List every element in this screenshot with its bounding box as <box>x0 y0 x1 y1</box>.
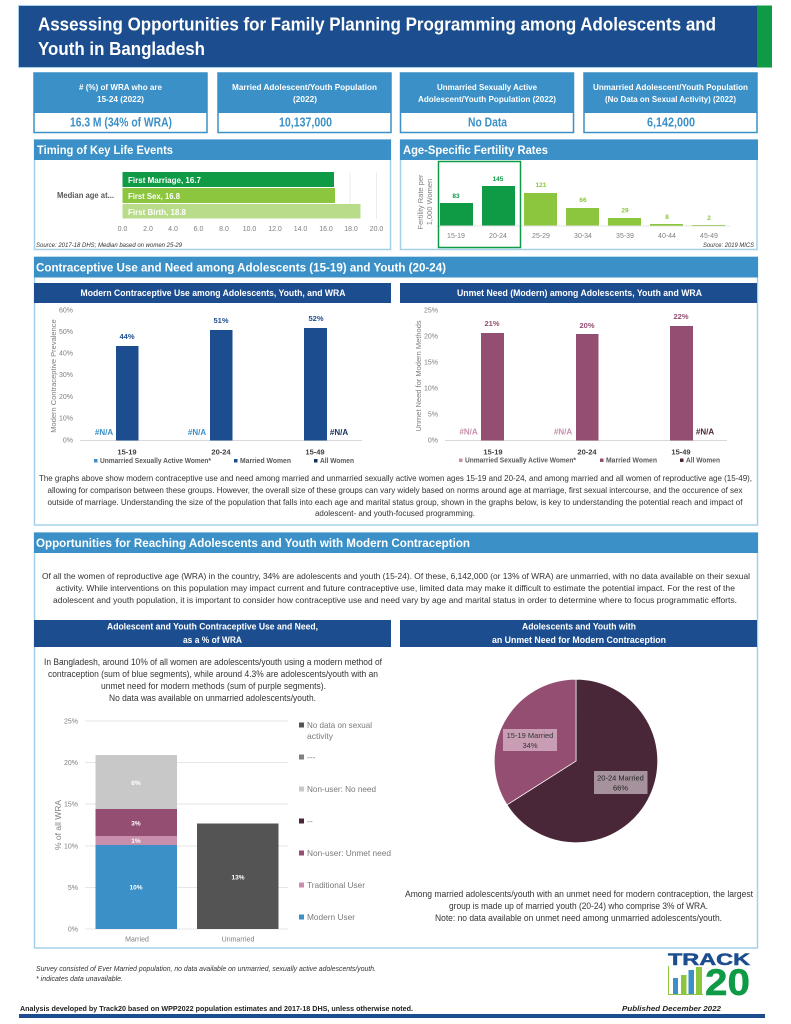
bar chart: unmet need: #N/A <box>554 428 572 436</box>
bar chart: median age: 14.0 <box>294 226 307 233</box>
text block: graphs explanation <box>39 473 752 518</box>
stacked bar chart: percent of WRA: Married <box>125 936 149 944</box>
bar chart: unmet need: 5% <box>428 412 438 418</box>
bar chart: modern contraceptive use: 50% <box>59 329 73 336</box>
stat card: unmarried no data population: 6,142,000 <box>647 116 695 130</box>
legend: modern use <box>94 458 354 465</box>
bar chart: unmet need: #N/A <box>459 428 478 436</box>
pie label: 15-19 married: 34% <box>522 741 538 750</box>
legend: unmet need <box>459 458 720 464</box>
panel: age-specific fertility rates <box>400 140 758 250</box>
bar chart: unmet need: 20% <box>424 334 438 340</box>
stat card: married population: 10,137,000 <box>279 116 332 130</box>
bar chart: modern contraceptive use: 15-49 <box>305 448 325 456</box>
text block: pie description: Among married adolescents/youth with an unmet need for modern contraception, the largest <box>405 889 753 899</box>
bar chart: fertility rate by age: 25-29 <box>532 233 550 240</box>
subheading: unmet need for modern contraception: Adolescents and Youth with <box>522 622 636 632</box>
bar chart: modern contraceptive use: 10% <box>59 416 73 422</box>
bar chart: fertility rate by age: 121 <box>536 182 547 189</box>
bar chart: unmet need: 22% <box>673 312 689 321</box>
heading: opportunities: Opportunities for Reaching Adolescents and Youth with Modern Contraception <box>36 536 470 550</box>
bar chart: fertility rate by age: 35-39 <box>616 233 634 240</box>
bar chart: median age: 20.0 <box>370 226 383 233</box>
bar chart: modern contraceptive use: 51% <box>213 316 229 325</box>
text block: stacked chart description: unmet need for modern methods (sum of purple segments). <box>101 681 326 691</box>
bar chart: modern contraceptive use: 0% <box>63 438 73 444</box>
subheading: unmet need: Unmet Need (Modern) among Adolescents, Youth and WRA <box>457 288 702 298</box>
bar chart: fertility rate by age: 1,000 Women <box>425 179 434 225</box>
legend: stacked chart <box>299 720 391 922</box>
bar chart: median age: 4.0 <box>168 226 178 233</box>
source note: Source: 2019 MICS <box>703 243 754 249</box>
stat card: WRA 15-24 <box>34 73 207 132</box>
stacked bar chart: percent of WRA: 5% <box>68 885 78 892</box>
legend: stacked chart: --- <box>307 752 316 762</box>
bar chart: median age <box>57 172 383 233</box>
stat card: married population <box>218 73 391 132</box>
stat card: unmarried sexually active population: No Data <box>468 116 508 130</box>
subheading: use and need as percent of WRA: as a % of WRA <box>183 635 242 645</box>
footnotes: * indicates data unavailable. <box>36 976 123 983</box>
bar chart: fertility rate by age: 83 <box>452 193 460 200</box>
stacked bar chart: percent of WRA: 10% <box>64 844 78 850</box>
highlight box: 15-24 ages <box>438 162 520 248</box>
legend: modern use: Unmarried Sexually Active Women* <box>100 458 211 465</box>
bar chart: fertility rate by age: 8 <box>665 214 669 221</box>
stacked bar chart: percent of WRA: 10% <box>129 884 143 892</box>
text block: opportunities intro: activity. While interventions on this population may impact current and future contraceptive use, limited data may make it difficult to estimate the potential impact. For the rest of the <box>56 583 735 593</box>
stat card: unmarried no data population: Unmarried Adolescent/Youth Population <box>593 82 748 92</box>
bar chart: unmet need: 20-24 <box>577 448 597 456</box>
bar chart: median age: First Sex, 16.8 <box>128 192 181 201</box>
stacked bar chart: percent of WRA: 6% <box>131 780 141 787</box>
text block: stacked chart description: No data was available on unmarried adolescents/youth. <box>109 693 316 703</box>
subheading: use and need as percent of WRA: Adolescent and Youth Contraceptive Use and Need, <box>107 622 318 632</box>
logo: Track20: TRACK <box>668 950 751 969</box>
pie label: 15-19 married: 15-19 Married <box>507 731 553 740</box>
stat card: married population: (2022) <box>293 94 317 104</box>
bar chart: fertility rate by age <box>416 174 730 240</box>
stacked bar chart: percent of WRA: 0% <box>68 926 78 934</box>
footer: analysis credit: Analysis developed by Track20 based on WPP2022 population estimates and 2017-18 DHS, unless otherwise noted. <box>20 1004 413 1013</box>
title <box>38 14 716 59</box>
bar chart: median age: First Birth, 18.8 <box>128 208 187 217</box>
stacked bar chart: percent of WRA: 13% <box>231 874 245 882</box>
legend: stacked chart: activity <box>307 731 334 741</box>
panel: opportunities for reaching adolescents and youth <box>34 532 758 948</box>
footer bar <box>19 1014 765 1018</box>
bar chart: median age: 18.0 <box>344 226 358 233</box>
text block: graphs explanation: outside of marriage. Understanding the size of the population that falls into each age and marital status group, shown in the graphs below, is key to understanding the potential reach and impact of <box>48 497 743 507</box>
bar chart: fertility rate by age: 15-19 <box>447 233 465 240</box>
bar chart: fertility rate by age: 2 <box>707 215 711 222</box>
text block: graphs explanation: The graphs above show modern contraceptive use and need among married and unmarried sexually active women ages 15-19 and 20-24, and among married and all women of reproductive age (15-49), <box>39 473 752 483</box>
bar chart: modern contraceptive use: 20-24 <box>211 448 231 456</box>
stacked bar chart: percent of WRA: % of all WRA <box>53 800 63 850</box>
bar chart: fertility rate by age: 30-34 <box>574 233 592 240</box>
heading: timing: Timing of Key Life Events <box>37 143 173 157</box>
pie label: 20-24 married: 20-24 Married <box>597 774 644 782</box>
text block: graphs explanation: adolescent- and youth-focused programming. <box>315 508 475 518</box>
text block: stacked chart description <box>44 657 382 703</box>
stacked bar chart: percent of WRA: Unmarried <box>222 936 254 944</box>
stat card: unmarried no data population <box>584 73 757 132</box>
stacked bar chart: percent of WRA: 3% <box>131 820 141 828</box>
panel: timing of key life events <box>34 140 391 250</box>
bar chart: median age: 10.0 <box>243 226 256 233</box>
bar chart: median age: Median age at... <box>57 191 114 200</box>
subheading: unmet need for modern contraception <box>400 620 757 647</box>
legend: stacked chart: Modern User <box>307 912 355 922</box>
stat card: WRA 15-24: 16.3 M (34% of WRA) <box>70 116 172 130</box>
pie label: 15-19 married <box>503 729 557 751</box>
legend: modern use: All Women <box>320 458 354 465</box>
legend: stacked chart: No data on sexual <box>307 720 372 730</box>
logo: Track20: 20 <box>705 962 750 1003</box>
stat card: unmarried sexually active population: Adolescent/Youth Population (2022) <box>418 94 556 104</box>
title: Assessing Opportunities for Family Planning Programming among Adolescents and <box>38 14 716 34</box>
text block: pie description: Note: no data available on unmet need among unmarried adolescents/youth. <box>435 913 722 923</box>
footnotes: Survey consisted of Ever Married population, no data available on unmarried, sexually active adolescents/youth. <box>36 966 376 973</box>
stacked bar chart: percent of WRA: 25% <box>64 718 78 726</box>
bar chart: modern contraceptive use: 15-19 <box>117 448 137 456</box>
text block: pie description: group is made up of married youth (20-24) who comprise 3% of WRA. <box>449 901 708 911</box>
bar chart: fertility rate by age: 145 <box>493 176 504 183</box>
text block: graphs explanation: allowing for comparison between these groups. However, the overall size of these groups can vary widely based on norms around age at marriage, first sexual intercourse, and the occurence of sex <box>48 485 743 495</box>
subheading: modern use: Modern Contraceptive Use among Adolescents, Youth, and WRA <box>80 288 346 298</box>
bar chart: unmet need: 15-49 <box>671 448 691 456</box>
bar chart: median age: 8.0 <box>219 226 229 233</box>
text block: opportunities intro <box>42 571 750 605</box>
bar chart: modern contraceptive use: #N/A <box>188 428 206 437</box>
legend: unmet need: Unmarried Sexually Active Women* <box>465 458 576 464</box>
stacked bar chart: percent of WRA: 15% <box>64 802 78 808</box>
bar chart: modern contraceptive use: 44% <box>119 332 135 341</box>
legend: stacked chart: Non-user: Unmet need <box>307 848 391 858</box>
legend: stacked chart: -- <box>307 816 313 826</box>
bar chart: unmet need: 15% <box>424 360 438 366</box>
title banner <box>18 6 772 68</box>
pie label: 20-24 married: 66% <box>613 784 628 792</box>
panel: contraceptive use and need <box>34 257 758 525</box>
bar chart: median age: 12.0 <box>268 226 282 233</box>
bar chart: fertility rate by age: 40-44 <box>658 233 676 240</box>
bar chart: modern contraceptive use: 52% <box>308 314 324 323</box>
stacked bar chart: percent of WRA <box>53 718 391 944</box>
subheading: use and need as percent of WRA <box>34 620 391 647</box>
text block: opportunities intro: Of all the women of reproductive age (WRA) in the country, 34% are adolescents and youth (15-24). Of these, 6,142,000 (or 13% of WRA) are unmarried, with no data available on their sexual <box>42 571 750 581</box>
stat card: unmarried no data population: (No Data on Sexual Activity) (2022) <box>605 94 736 104</box>
stacked bar chart: percent of WRA: 20% <box>64 760 78 767</box>
subheading: unmet need for modern contraception: an Unmet Need for Modern Contraception <box>492 635 666 645</box>
stat card: unmarried sexually active population: Unmarried Sexually Active <box>437 82 537 92</box>
bar chart: unmet need: 15-19 <box>483 448 503 456</box>
bar chart: modern contraceptive use: Modern Contraceptive Prevalence <box>49 319 58 433</box>
bar chart: unmet need: 10% <box>424 386 438 392</box>
bar chart: fertility rate by age: 20-24 <box>489 233 507 240</box>
bar chart: unmet need: 0% <box>428 438 438 444</box>
legend: unmet need: All Women <box>686 458 720 464</box>
source note: Source: 2017-18 DHS; Median based on women 25-29 <box>36 243 183 249</box>
bar chart: median age: First Marriage, 16.7 <box>128 176 202 185</box>
bar chart: unmet need <box>414 308 727 464</box>
bar chart: modern contraceptive use: 60% <box>59 308 73 314</box>
title: Youth in Bangladesh <box>38 38 205 59</box>
bar chart: modern contraceptive use: 20% <box>59 394 73 401</box>
bar chart: modern contraceptive use: 40% <box>59 350 73 358</box>
logo: Track20 <box>668 950 751 1003</box>
stat card: WRA 15-24: 15-24 (2022) <box>97 94 144 104</box>
text block: stacked chart description: In Bangladesh, around 10% of all women are adolescents/youth using a modern method of <box>44 657 382 667</box>
bar chart: modern contraceptive use: 30% <box>59 372 73 379</box>
bar chart: fertility rate by age: 66 <box>579 197 587 204</box>
bar chart: unmet need: Unmet Need for Modern Methods <box>414 320 423 432</box>
text block: pie description <box>405 889 753 923</box>
legend: stacked chart: Non-user: No need <box>307 784 376 794</box>
text block: stacked chart description: contraception (sum of blue segments), while around 4.3% are adolescents/youth with an <box>48 669 378 679</box>
bar chart: modern contraceptive use: #N/A <box>330 428 348 437</box>
bar chart: unmet need: 25% <box>424 308 438 314</box>
bar chart: unmet need: 20% <box>579 321 595 330</box>
heading: contraceptive use: Contraceptive Use and Need among Adolescents (15-19) and Youth (20-24) <box>36 260 446 274</box>
footer: publication date: Published December 2022 <box>622 1004 722 1013</box>
bar chart: median age: 0.0 <box>118 226 127 233</box>
heading: fertility: Age-Specific Fertility Rates <box>403 143 548 157</box>
legend: unmet need: Married Women <box>606 458 657 464</box>
bar chart: unmet need: #N/A <box>696 428 714 436</box>
stacked bar chart: percent of WRA: 1% <box>131 838 141 845</box>
bar chart: modern contraceptive use: #N/A <box>95 428 113 437</box>
stat card: unmarried sexually active population <box>400 73 574 132</box>
bar chart: fertility rate by age: 29 <box>621 208 629 214</box>
bar chart: modern contraceptive use <box>49 308 362 465</box>
subheading: modern use <box>34 283 391 303</box>
bar chart: median age: 16.0 <box>319 226 333 233</box>
bar chart: fertility rate by age: Fertility Rate per <box>416 174 425 230</box>
pie chart: unmet need by age <box>494 679 658 843</box>
text block: opportunities intro: adolescent and youth population, it is important to consider how contraceptive use and need vary by age and marital status in order to determine where to focus programmatic efforts. <box>53 595 737 605</box>
legend: stacked chart: Traditional User <box>307 880 365 890</box>
bar chart: fertility rate by age: 45-49 <box>700 233 718 240</box>
bar chart: unmet need: 21% <box>484 319 500 328</box>
bar chart: median age: 2.0 <box>143 226 153 233</box>
pie label: 20-24 married <box>594 771 648 794</box>
stat card: WRA 15-24: # (%) of WRA who are <box>79 82 162 92</box>
bar chart: median age: 6.0 <box>194 226 203 233</box>
stat card: married population: Married Adolescent/Youth Population <box>232 82 377 92</box>
subheading: unmet need <box>400 283 757 303</box>
footnotes <box>36 966 376 983</box>
legend: modern use: Married Women <box>240 458 291 465</box>
